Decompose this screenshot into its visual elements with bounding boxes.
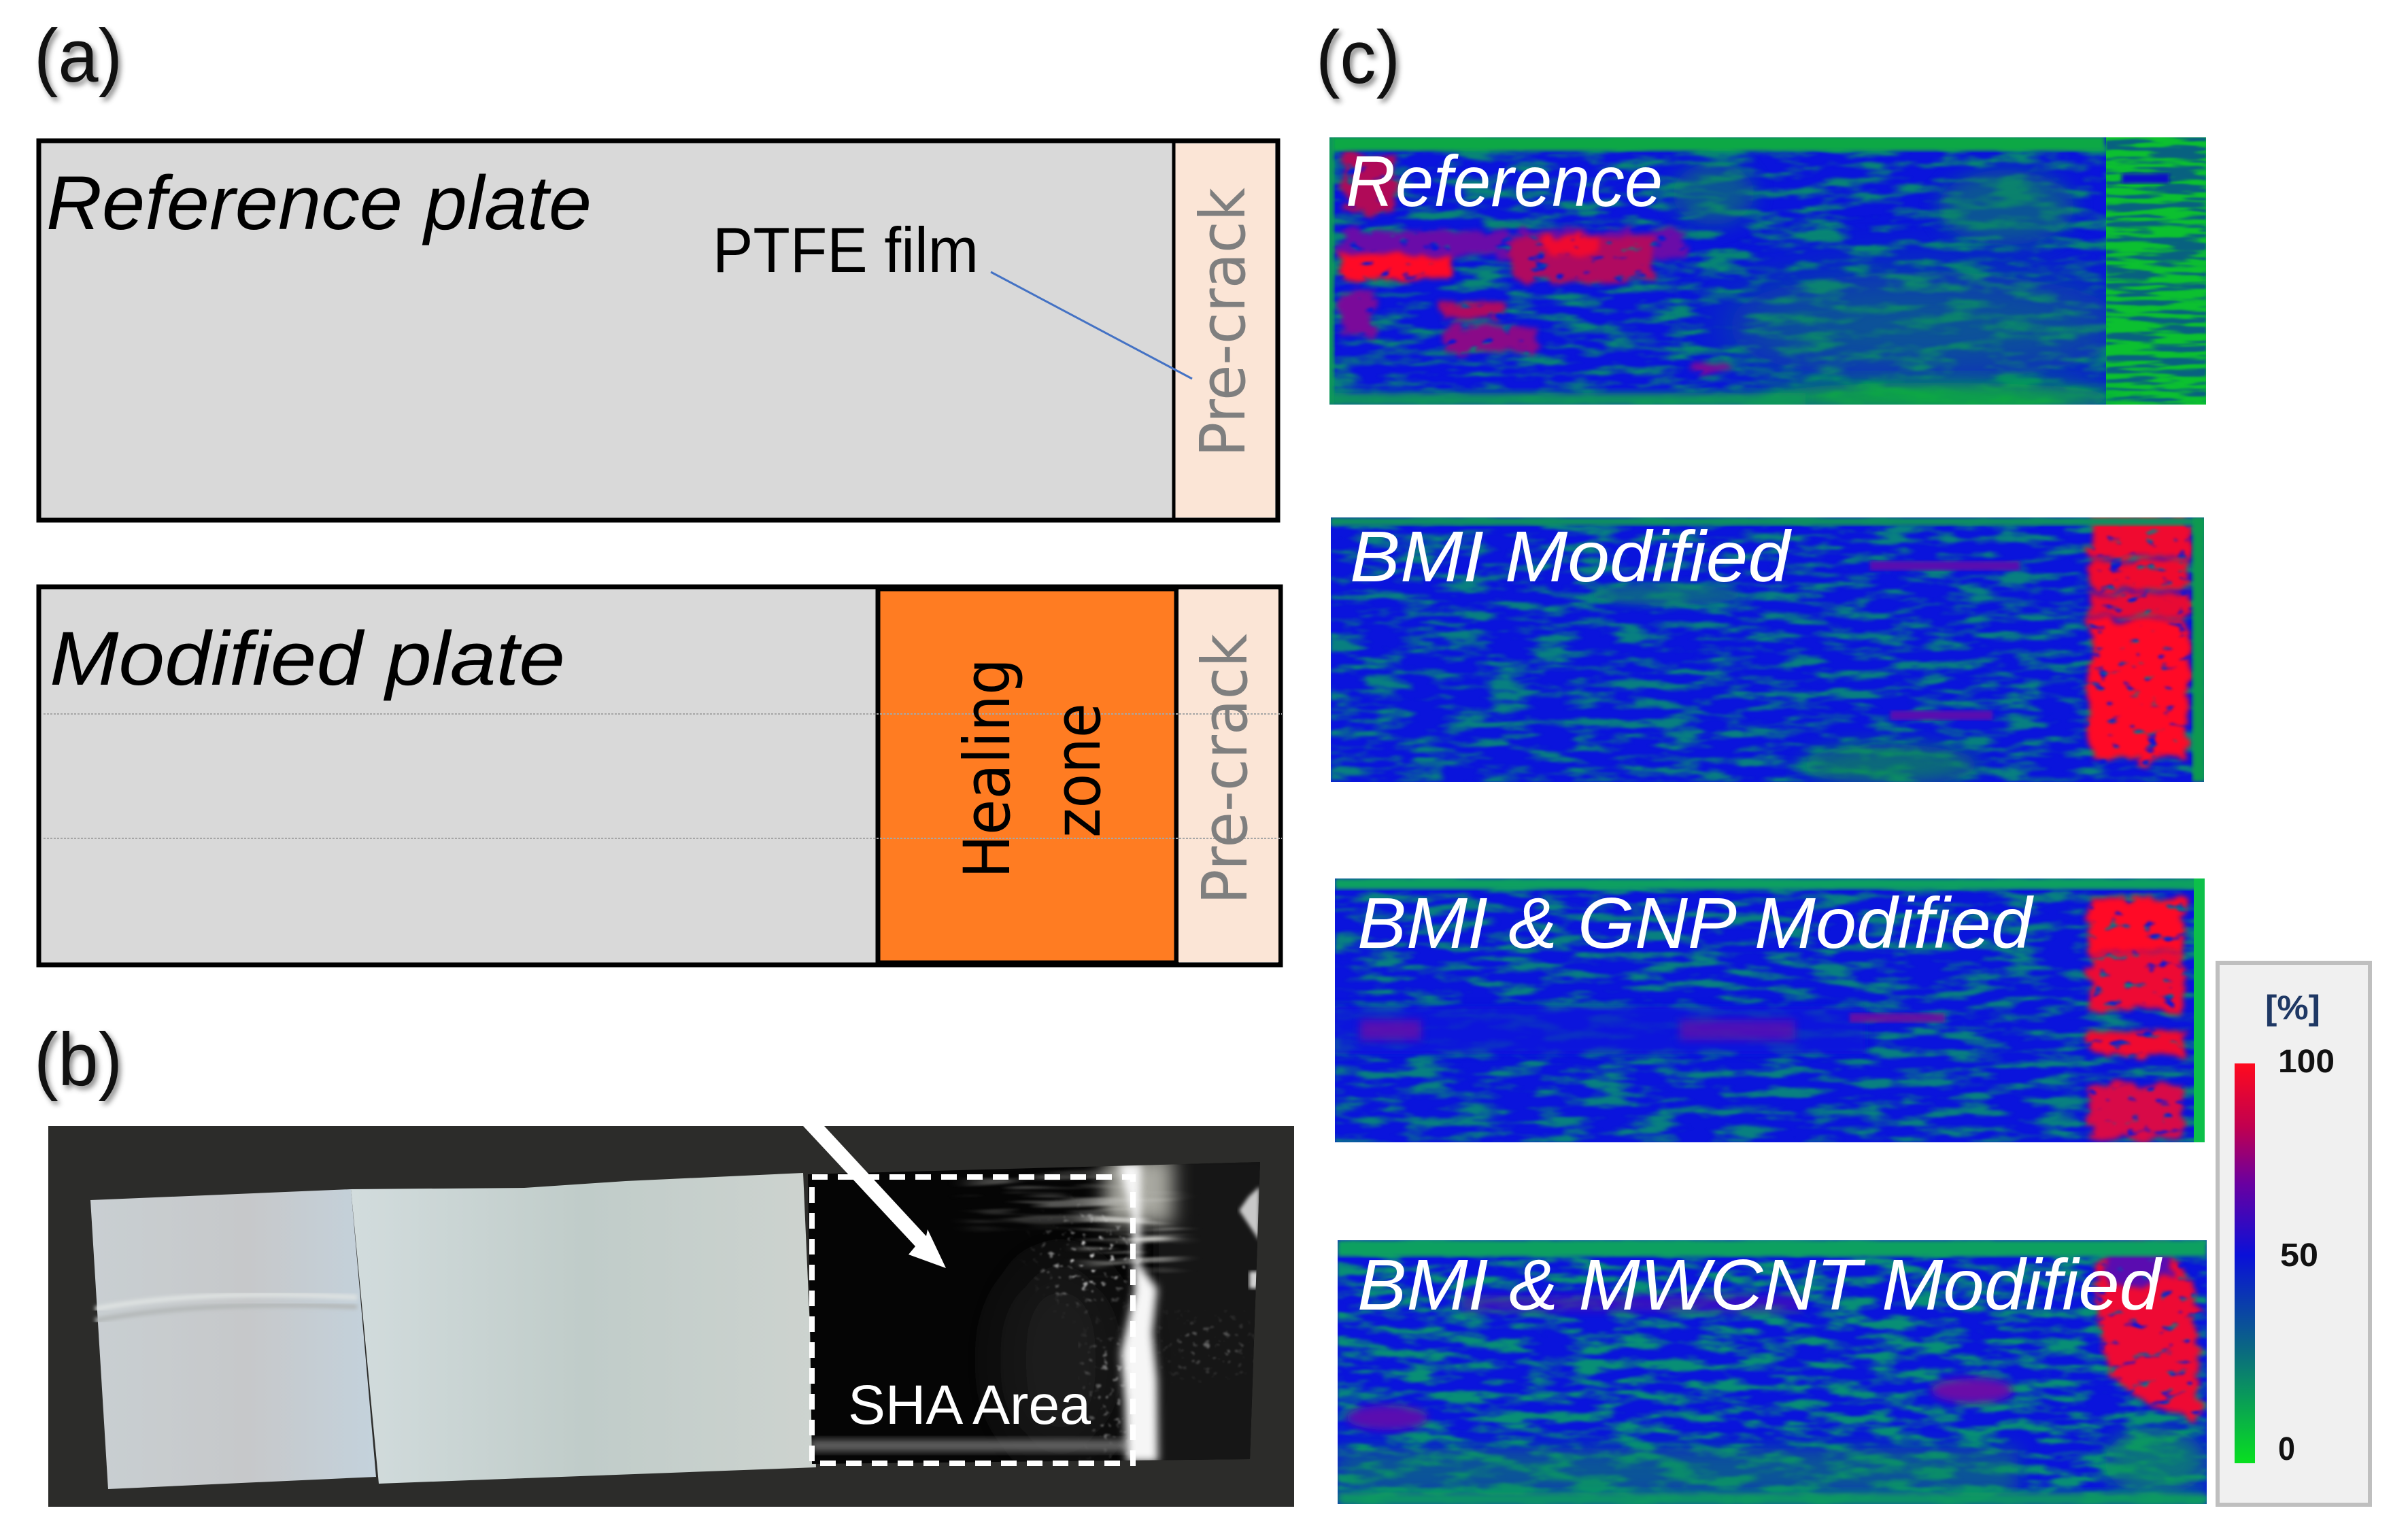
label: Healing zone: zone bbox=[1041, 703, 1115, 838]
red healing-zone band bbox=[2089, 514, 2187, 760]
heat map: BMI and GNP Modified bbox=[1335, 878, 2206, 1142]
label: Reference plate: Reference plate bbox=[46, 160, 592, 245]
heat map: Reference bbox=[1325, 136, 2206, 413]
heat map: BMI Modified bbox=[1331, 514, 2206, 785]
dashed SHA area outline bbox=[812, 1177, 1133, 1463]
reference plate diagram bbox=[39, 141, 1278, 520]
label: SHA Area: SHA Area bbox=[848, 1374, 1091, 1436]
label: Reference: Reference bbox=[1346, 141, 1663, 222]
label: Healing zone: Healing bbox=[951, 658, 1025, 878]
red healing-zone patch bbox=[2097, 1242, 2199, 1420]
panel label (c): (c) bbox=[1316, 16, 1400, 99]
left white sheet bbox=[90, 1189, 376, 1489]
label: Modified plate: Modified plate bbox=[50, 616, 565, 701]
modified plate diagram bbox=[39, 587, 1282, 965]
red damage patches bbox=[1340, 155, 1731, 376]
label: Pre-crack: Pre-crack bbox=[1187, 187, 1259, 457]
red healing-zone patches bbox=[2089, 898, 2188, 1139]
label: Healing zone bbox=[951, 658, 1115, 878]
label: BMI Modified: BMI Modified bbox=[1350, 517, 1792, 597]
legend tick 50: 50 bbox=[2280, 1238, 2318, 1274]
legend unit: [%] bbox=[2265, 989, 2320, 1027]
panel label (a): (a) bbox=[34, 14, 122, 98]
panel label (b): (b) bbox=[34, 1018, 122, 1102]
label: BMI & GNP Modified: BMI & GNP Modified bbox=[1357, 883, 2034, 963]
heat map: BMI and MWCNT Modified bbox=[1338, 1240, 2207, 1506]
leader line to pre-crack bbox=[991, 272, 1192, 379]
panel: plate schematics bbox=[39, 141, 1282, 965]
panel: specimen photograph bbox=[48, 1126, 1294, 1507]
label: BMI & MWCNT Modified: BMI & MWCNT Modified bbox=[1357, 1245, 2163, 1325]
legend colour bar bbox=[2235, 1063, 2255, 1463]
right end strip bbox=[2106, 137, 2206, 405]
glare band bbox=[1119, 1164, 1158, 1462]
arrow bbox=[803, 1126, 946, 1268]
healing zone block bbox=[878, 589, 1176, 963]
label: Pre-crack on modified plate: Pre-crack bbox=[1189, 633, 1261, 904]
colour scale legend bbox=[2218, 963, 2370, 1505]
label: PTFE film: PTFE film bbox=[713, 214, 979, 286]
panel: C-scan heat maps bbox=[1325, 136, 2207, 1506]
black specimen with gloss bbox=[808, 1156, 1265, 1465]
legend tick 0: 0 bbox=[2278, 1431, 2295, 1467]
right white sheet bbox=[351, 1173, 816, 1484]
legend tick 100: 100 bbox=[2278, 1044, 2335, 1080]
